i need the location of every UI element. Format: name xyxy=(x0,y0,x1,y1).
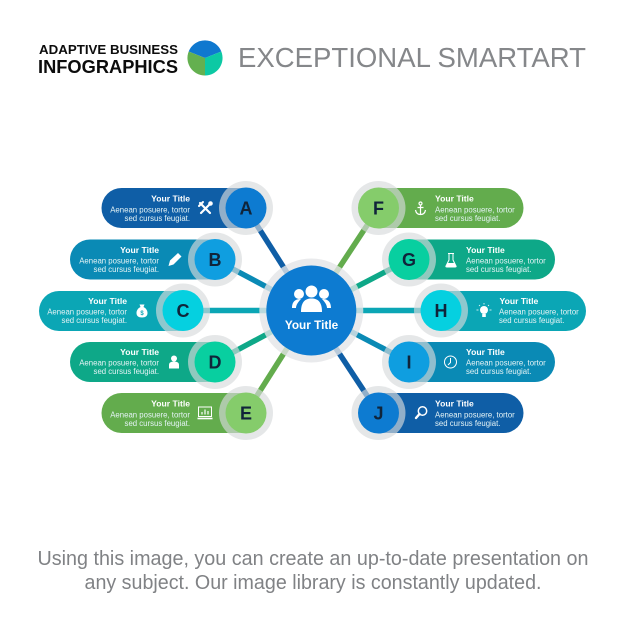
node H: H xyxy=(434,301,448,321)
connector D xyxy=(215,310,311,362)
node F: F xyxy=(373,198,384,218)
node B xyxy=(70,232,242,286)
node J: Your Title xyxy=(435,398,474,408)
node B: B xyxy=(208,250,222,270)
node E: Aenean posuere, tortor xyxy=(110,410,190,419)
node D xyxy=(70,335,242,389)
node E: Your Title xyxy=(151,398,190,408)
node H: sed cursus feugiat. xyxy=(499,316,564,325)
connector G xyxy=(311,260,409,310)
node A: Aenean posuere, tortor xyxy=(110,205,190,214)
footer text xyxy=(38,548,588,594)
node G: Aenean posuere, tortor xyxy=(466,256,546,265)
node I: Your Title xyxy=(466,347,505,357)
connector C xyxy=(183,308,311,313)
node H xyxy=(414,284,586,338)
node G: sed cursus feugiat. xyxy=(466,265,531,274)
icon: magnifier xyxy=(416,407,427,418)
node D: D xyxy=(208,352,222,372)
footer text: any subject. Our image library is constantly updated. xyxy=(84,572,542,594)
icon: brand pie xyxy=(187,40,223,76)
node J: sed cursus feugiat. xyxy=(435,419,500,428)
central hub xyxy=(259,258,363,362)
node H: Your Title xyxy=(500,296,539,306)
node E: E xyxy=(240,404,252,424)
connector E xyxy=(246,310,311,413)
node A: A xyxy=(240,198,252,218)
node F: Aenean posuere, tortor xyxy=(435,205,515,214)
icon: light bulb xyxy=(476,303,492,317)
node J: Aenean posuere, tortor xyxy=(435,410,515,419)
node I: Aenean posuere, tortor xyxy=(466,358,546,367)
node B: Your Title xyxy=(120,245,159,255)
connectors xyxy=(183,208,441,413)
footer text: Using this image, you can create an up-to-date presentation on xyxy=(38,548,588,570)
node A xyxy=(102,181,273,235)
icon: clock xyxy=(444,356,456,368)
icon: anchor xyxy=(416,202,426,214)
icon: pencil xyxy=(168,253,182,266)
node G: G xyxy=(402,250,416,270)
node A: Your Title xyxy=(151,194,190,204)
node D: sed cursus feugiat. xyxy=(94,367,159,376)
brand heading: INFOGRAPHICS xyxy=(38,56,178,77)
node E xyxy=(102,386,273,440)
node E: sed cursus feugiat. xyxy=(125,419,190,428)
node D: Your Title xyxy=(120,347,159,357)
icon: laptop chart xyxy=(198,407,212,418)
node C: Aenean posuere, tortor xyxy=(47,307,127,316)
node I: sed cursus feugiat. xyxy=(466,367,531,376)
icon: flask xyxy=(446,254,456,267)
icon: tools xyxy=(199,202,212,213)
node B: Aenean posuere, tortor xyxy=(79,256,159,265)
connector B xyxy=(215,260,311,310)
node F xyxy=(352,181,524,235)
brand heading xyxy=(38,42,178,77)
node J: J xyxy=(373,404,384,424)
node A: sed cursus feugiat. xyxy=(125,214,190,223)
node J xyxy=(352,386,524,440)
node G xyxy=(382,232,555,286)
connector A xyxy=(246,208,311,310)
connector J xyxy=(311,310,378,413)
node H: Aenean posuere, tortor xyxy=(499,307,579,316)
node B: sed cursus feugiat. xyxy=(94,265,159,274)
icon: person xyxy=(169,356,179,368)
node C: Your Title xyxy=(88,296,127,306)
node I xyxy=(382,335,555,389)
brand heading: ADAPTIVE BUSINESS xyxy=(39,42,178,57)
title: EXCEPTIONAL SMARTART xyxy=(238,42,586,73)
node C xyxy=(39,284,210,338)
node G: Your Title xyxy=(466,245,505,255)
connector H xyxy=(311,308,441,313)
node F: sed cursus feugiat. xyxy=(435,214,500,223)
icon: money bag: $ xyxy=(140,311,144,317)
node D: Aenean posuere, tortor xyxy=(79,358,159,367)
node C: sed cursus feugiat. xyxy=(62,316,127,325)
node I: I xyxy=(406,352,412,372)
icon: money bag xyxy=(136,304,148,318)
hub label: Your Title xyxy=(285,318,339,332)
icon: group of people xyxy=(292,286,331,312)
connector I xyxy=(311,310,409,362)
node F: Your Title xyxy=(435,194,474,204)
connector F xyxy=(311,208,378,310)
node C: C xyxy=(176,301,190,321)
